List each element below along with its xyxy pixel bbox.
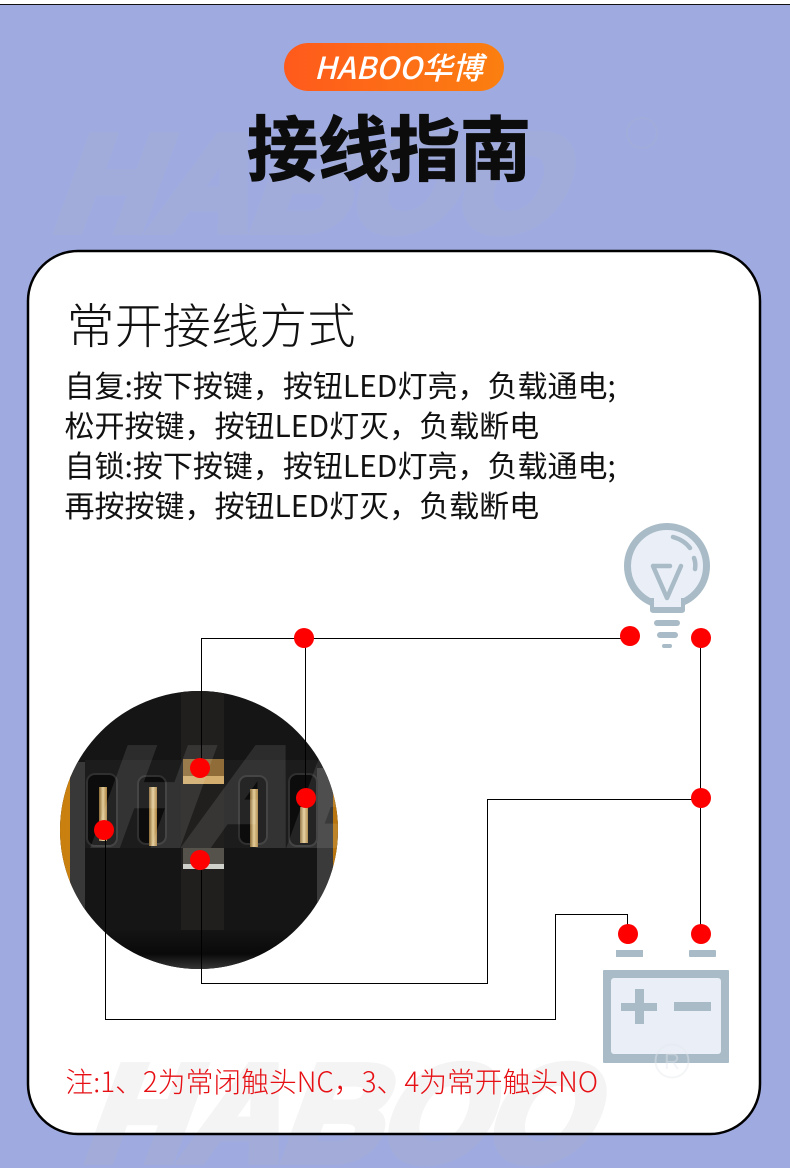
terminal strip xyxy=(85,760,317,848)
pin slots xyxy=(87,774,117,846)
switch photo xyxy=(60,691,338,969)
title: 接线指南 xyxy=(247,94,531,196)
icon: battery: R xyxy=(664,1049,680,1074)
bottom centre terminal xyxy=(183,848,224,864)
description text: 自复:按下按键，按钮LED灯亮，负载通电; xyxy=(64,362,616,406)
watermark: photo logo: HABOO xyxy=(77,721,637,872)
card heading: 常开接线方式 xyxy=(66,287,356,357)
orange edge left xyxy=(60,775,72,890)
description text xyxy=(64,362,616,526)
description text: 松开按键，按钮LED灯灭，负载断电 xyxy=(64,402,539,446)
orange edge right xyxy=(332,790,338,870)
panel: wiring card xyxy=(28,251,760,1168)
icon: light bulb xyxy=(628,526,706,648)
pins xyxy=(99,787,107,841)
watermark: top logo: HABOO xyxy=(39,108,599,259)
wires xyxy=(106,638,700,1020)
centre channel xyxy=(181,691,224,931)
top edge strip xyxy=(0,0,790,5)
description text: 再按按键，按钮LED灯灭，负载断电 xyxy=(64,482,539,526)
card outline xyxy=(28,251,760,1134)
description text: 自锁:按下按键，按钮LED灯亮，负载通电; xyxy=(64,442,616,486)
top centre terminal xyxy=(183,759,224,776)
note: 注:1、2为常闭触头NC，3、4为常开触头NO xyxy=(66,1061,598,1101)
icon: battery xyxy=(603,950,729,1078)
lower body shade xyxy=(102,930,296,969)
grey side pieces xyxy=(70,762,85,910)
connection dots xyxy=(94,626,711,944)
brand pill: HABOO华博 xyxy=(314,44,487,88)
